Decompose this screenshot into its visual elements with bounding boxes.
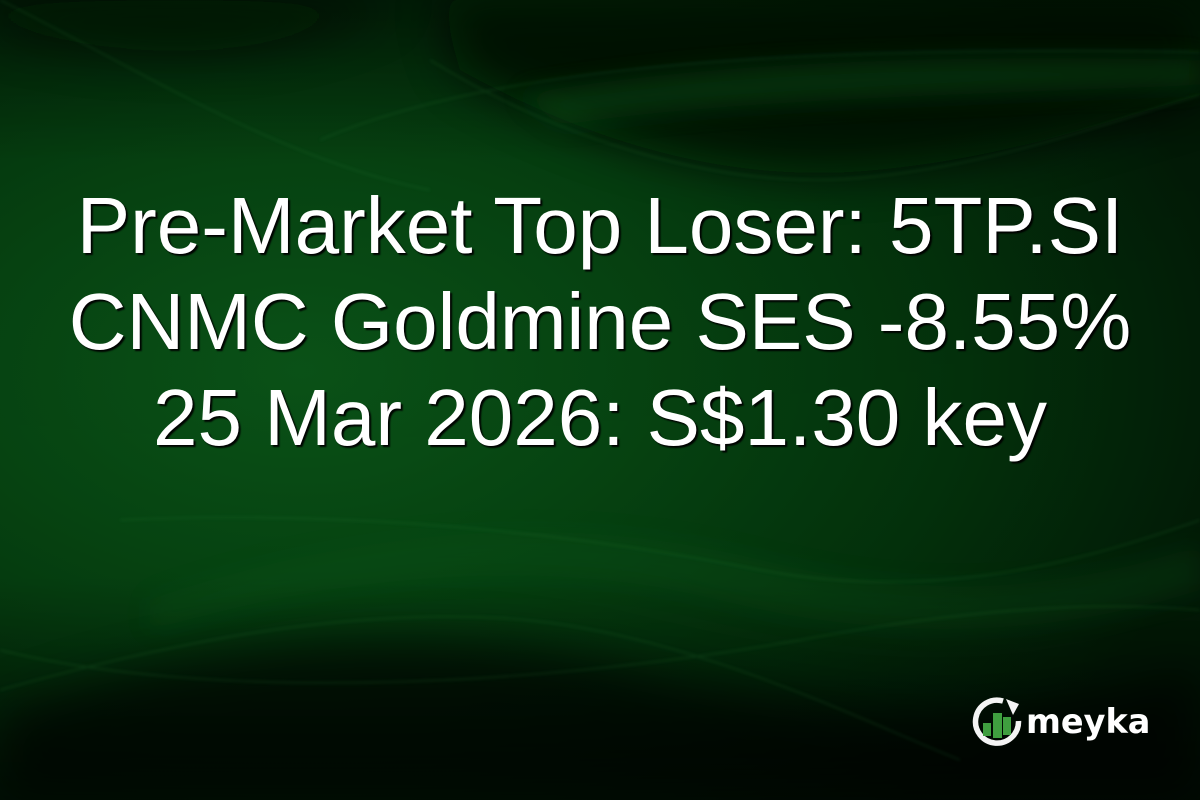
title: 25 Mar 2026: S$1.30 key <box>153 373 1047 462</box>
title <box>69 181 1131 464</box>
title: CNMC Goldmine SES -8.55% <box>69 277 1131 366</box>
logo: meyka <box>972 697 1150 746</box>
wordmark: meyka <box>1026 702 1150 741</box>
light wave lower middle <box>150 532 1200 630</box>
title: Pre-Market Top Loser: 5TP.SI <box>77 181 1123 270</box>
dark wave top left <box>0 0 400 51</box>
icon: circular arrow with bars <box>972 697 1022 746</box>
dark wave top right <box>440 0 1200 173</box>
dark wave bottom <box>0 639 1200 800</box>
light wave upper right <box>520 58 1200 125</box>
